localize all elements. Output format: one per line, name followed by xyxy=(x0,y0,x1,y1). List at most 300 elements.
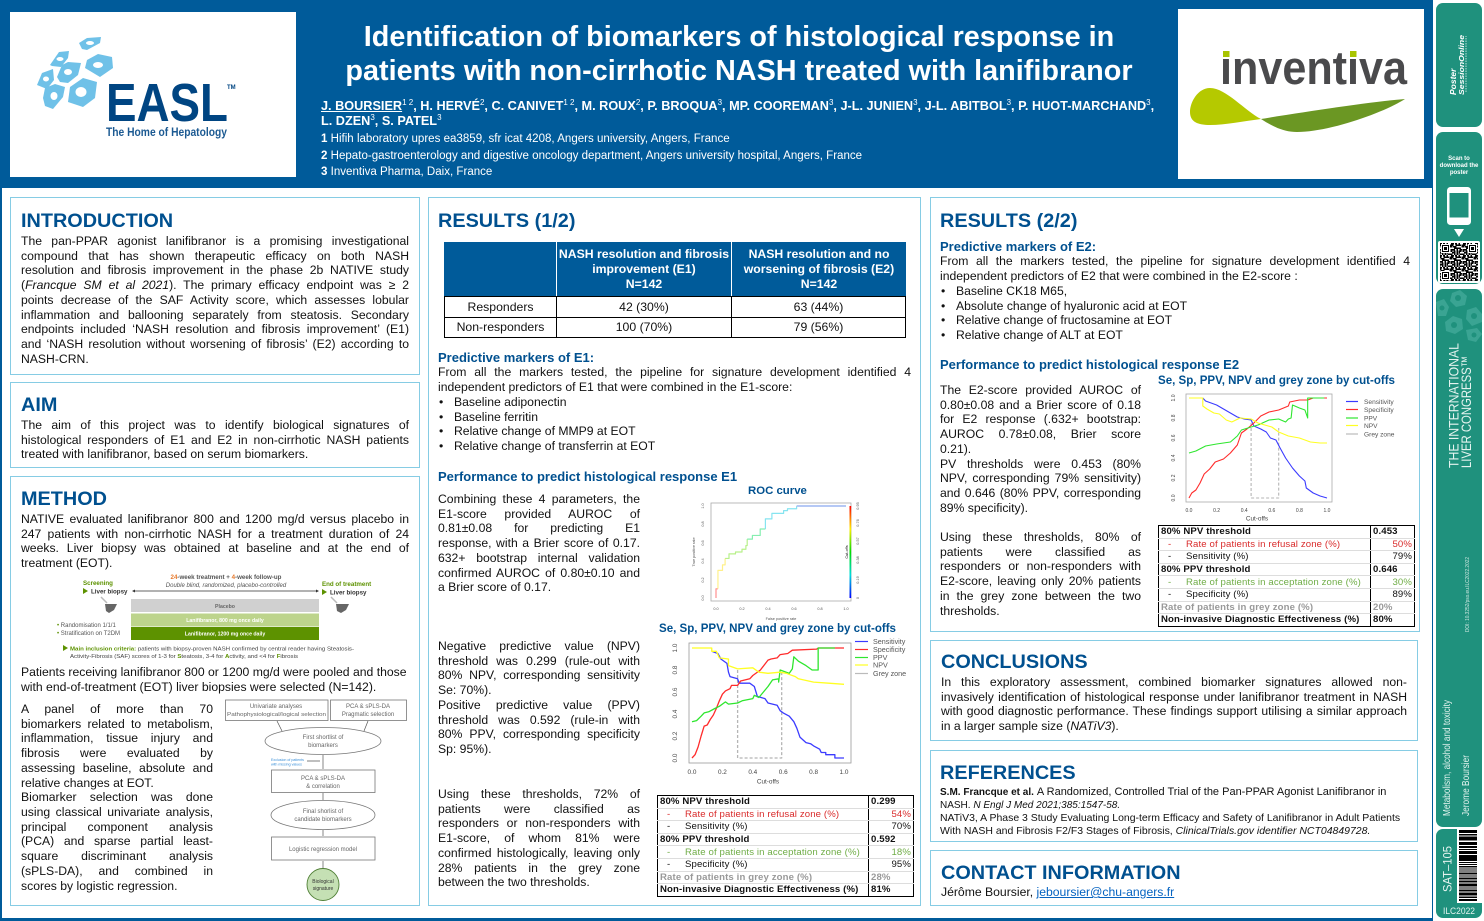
table: E1 thresholds: 95% xyxy=(891,859,911,870)
chart: ROC curve: 0.19 xyxy=(856,576,860,584)
authors: L. DZEN3, S. PATEL3 xyxy=(321,112,442,128)
method intro text: 247 patients with non-cirrhotic NASH for a treatment duration of 24 xyxy=(21,527,409,541)
table: E1 thresholds: - xyxy=(667,859,670,870)
chart: E2 cut-offs: NPV xyxy=(1364,423,1378,430)
introduction text xyxy=(21,234,409,366)
chart: E2 cut-offs: 1.0 xyxy=(1324,508,1331,514)
chart: E2 cut-offs: Specificity xyxy=(1364,407,1394,414)
sidebar xyxy=(1436,3,1482,918)
E2 classification text: patients were classified as xyxy=(940,545,1141,559)
chart: E2 cut-offs: 0.0 xyxy=(1186,508,1193,514)
chart: ROC curve: 0.4 xyxy=(765,607,771,611)
diagram: NATIVE study design: Activity-Fibrosis (SAF) scores of 1-3 for Steatosis, 3-4 for Activity, and <4 for Fibrosis xyxy=(70,654,298,660)
chart: E1 cut-offs: 0.0 xyxy=(688,769,697,776)
heading: aim: AIM xyxy=(21,394,57,416)
diagram: biomarker selection flowchart: signature xyxy=(313,886,333,892)
diagram: NATIVE study design: 24-week treatment + 4-week follow-up xyxy=(171,574,282,581)
table: E2 thresholds: 79% xyxy=(1392,551,1412,562)
biomarker panel text: Biomarker selection was done xyxy=(21,790,213,804)
table: E1 thresholds: Rate of patients in acceptation zone (%) xyxy=(685,847,860,858)
panel: scan to download: Scan to xyxy=(1448,156,1470,162)
chart: ROC curve: 0.2 xyxy=(739,607,745,611)
aim text: treated with lanifibranor, based on serum biomarkers. xyxy=(21,447,308,461)
method intro text: NATIVE evaluated lanifibranor 800 and 1200 mg/d versus placebo in xyxy=(21,512,409,526)
table body: 63 (44%) xyxy=(794,300,843,314)
E2 predictor list: Relative change of ALT at EOT xyxy=(956,328,1123,342)
E1 thresholds text: Sp: 95%). xyxy=(438,742,492,756)
E2 predictors text: From all the markers tested, the pipeline for signature development identified 4 xyxy=(940,254,1410,268)
panel: abstract number and barcode: ILC2022 xyxy=(1443,906,1475,917)
references text: S.M. Francque et al. A Randomized, Controlled Trial of the Pan-PPAR Agonist Lanifibranor in xyxy=(940,786,1386,798)
E1 thresholds text: Se: 70%). xyxy=(438,683,492,697)
diagram: NATIVE study design: • Randomisation 1/1/1 xyxy=(57,623,116,629)
biomarker panel text: using classical univariate analysis, xyxy=(21,805,213,819)
E1 thresholds text: 80% PPV, corresponding specificity xyxy=(438,727,640,741)
chart: E1 cut-offs: 0.4 xyxy=(672,709,679,718)
aim text xyxy=(21,418,410,461)
biomarker panel text: fibrosis were evaluated by xyxy=(21,746,213,760)
table: E2 thresholds: Rate of patients in grey zone (%) xyxy=(1161,602,1313,613)
logo: EASL: TM xyxy=(227,85,236,91)
diagram: biomarker selection flowchart: & correlation xyxy=(306,784,340,790)
chart: ROC curve: 0.8 xyxy=(701,521,705,527)
chart: E2 cut-offs: 0.0 xyxy=(1171,494,1177,501)
E1 thresholds text: threshold was 0.299 (rule-out with xyxy=(438,654,640,668)
diagram: biomarker selection flowchart: Biological xyxy=(312,879,334,885)
table: E1 thresholds: - xyxy=(667,809,670,820)
diagram: NATIVE study design: Lanifibranor, 800 mg once daily xyxy=(186,618,264,624)
table: E2 thresholds: 80% NPV threshold xyxy=(1161,526,1251,537)
title: patients with non-cirrhotic NASH treated with lanifibranor xyxy=(345,55,1133,87)
E1 score text: 0.81±0.08 for predicting E1 xyxy=(438,521,640,535)
heading: conclusions: CONCLUSIONS xyxy=(941,651,1088,673)
table: E1 thresholds: - xyxy=(667,847,670,858)
conclusions text: with good diagnostic performance. These findings support utilising a similar approach xyxy=(941,704,1407,718)
introduction text: compound that has shown therapeutic efficacy on both NASH xyxy=(21,249,409,263)
chart: E1 cut-offs: Specificity xyxy=(873,645,906,654)
E1 thresholds text xyxy=(438,639,640,756)
E1 classification text: patients were classified as xyxy=(438,802,640,816)
E2 predictor list: Relative change of fructosamine at EOT xyxy=(956,313,1172,327)
E1 thresholds text: Positive predictive value (PPV) xyxy=(438,698,640,712)
E1 score text: response, with a Brier score of 0.17. xyxy=(438,536,640,550)
diagram: NATIVE study design: Main inclusion criteria: patients with biopsy-proven NASH confirmed by central reader having Steatosis- xyxy=(70,646,354,652)
E1 score text: a Brier score of 0.17. xyxy=(438,580,551,594)
diagram: NATIVE study design: • Stratification on T2DM xyxy=(57,631,120,637)
panel: introduction xyxy=(10,197,420,375)
E2 score text: 0.80±0.08 and a Brier score of 0.18 xyxy=(940,398,1141,412)
table: E1 thresholds xyxy=(657,795,914,897)
introduction text: and ‘NASH resolution without worsening of fibrosis’ (E2) according to xyxy=(21,337,409,351)
chart: ROC curve: 0.2 xyxy=(701,577,705,583)
table: E1 thresholds: Sensitivity (%) xyxy=(685,821,748,832)
table: E1 E2 responders xyxy=(444,242,906,338)
chart: E1 cut-offs: Cut-offs xyxy=(757,778,779,786)
table: E2 thresholds: 0.646 xyxy=(1373,564,1398,575)
method intro text xyxy=(21,512,410,570)
table: E1 thresholds: 0.299 xyxy=(871,796,896,807)
chart title: ROC curve: ROC curve xyxy=(748,485,807,497)
chart: E2 cut-offs: Sensitivity xyxy=(1364,399,1394,406)
diagram: biomarker selection flowchart: with missing values xyxy=(271,762,302,766)
E1 predictor list: Baseline ferritin xyxy=(454,410,538,424)
table: E1 thresholds: 54% xyxy=(891,809,911,820)
panel: method xyxy=(10,476,420,906)
table: E2 thresholds: - xyxy=(1168,589,1171,600)
diagram: NATIVE study design: Lanifibranor, 1200 mg once daily xyxy=(185,632,265,638)
table: E1 thresholds: 81% xyxy=(871,884,891,895)
chart: E1 cut-offs: 0.0 xyxy=(672,753,679,762)
authors xyxy=(321,98,1154,128)
table: E2 thresholds: Rate of patients in acceptation zone (%) xyxy=(1186,577,1361,588)
biomarker panel text: biomarkers related to metabolism, xyxy=(21,717,213,731)
table body: 42 (30%) xyxy=(619,300,669,314)
panel: results 2/2 xyxy=(930,197,1420,632)
table header xyxy=(444,242,906,296)
logo: Inventiva: inventiva xyxy=(1220,41,1408,94)
pooling text: Patients receiving lanifibranor 800 or 1200 mg/d were pooled and those xyxy=(21,665,407,679)
table: E2 thresholds: 80% xyxy=(1373,614,1393,625)
E1 classification text xyxy=(438,787,640,889)
method intro text: treatment (EOT). xyxy=(21,556,112,570)
E1 thresholds text: threshold was 0.592 (rule-in with xyxy=(438,713,640,727)
panel: conclusions xyxy=(930,640,1418,741)
biomarker panel text: square discriminant analysis xyxy=(21,849,213,863)
table: E1 thresholds: - xyxy=(667,821,670,832)
heading: results 1/2: RESULTS (1/2) xyxy=(438,210,575,232)
E2 predictors text: independent predictors of E2 that were combined in the E2-score : xyxy=(940,269,1298,283)
introduction text: inflammation and ballooning separately from steatosis. Secondary xyxy=(21,308,409,322)
diagram: biomarker selection flowchart: Pragmatic selection xyxy=(342,712,394,718)
panel: poster session online xyxy=(1436,3,1482,127)
chart: ROC curve: 1.0 xyxy=(843,607,849,611)
chart: ROC curve: 0 xyxy=(856,597,860,599)
table: E2 thresholds: Specificity (%) xyxy=(1186,589,1249,600)
diagram: NATIVE study design: Double blind, randomized, placebo-controlled xyxy=(166,583,287,589)
E2 score text xyxy=(940,383,1142,515)
diagram: NATIVE study design xyxy=(57,574,372,660)
table header: worsening of fibrosis (E2) xyxy=(744,262,894,276)
conclusions text: in a larger sample size (NATiV3). xyxy=(941,719,1119,733)
table: E2 thresholds: 0.453 xyxy=(1373,526,1398,537)
table body: Non-responders xyxy=(457,320,544,334)
chart: E1 cut-offs xyxy=(672,637,906,786)
panel: results 1/2 xyxy=(428,197,921,906)
panel: congress and session: THE INTERNATIONAL xyxy=(1446,343,1462,468)
table: E2 thresholds: 20% xyxy=(1373,602,1393,613)
E1 score text: Combining these 4 parameters, the xyxy=(438,492,640,506)
chart: E2 cut-offs: 1.0 xyxy=(1171,394,1177,401)
affiliations: 2 Hepato-gastroenterology and digestive oncology department, Angers university hospital, Angers, France xyxy=(321,150,862,162)
E2 classification text: E2-score, leaving only 20% patients xyxy=(940,574,1141,588)
chart: E1 cut-offs: Grey zone xyxy=(873,669,906,678)
chart: E2 cut-offs: 0.4 xyxy=(1241,508,1248,514)
conclusions text: invasively identification of histological response under lanifibranor treatment in NASH xyxy=(941,690,1407,704)
E1 predictor list: Relative change of MMP9 at EOT xyxy=(454,424,636,438)
table: E1 thresholds: Rate of patients in grey zone (%) xyxy=(660,872,812,883)
E2 classification text: responders or non-responders with xyxy=(940,559,1141,573)
table: E2 thresholds: 89% xyxy=(1392,589,1412,600)
diagram: biomarker selection flowchart: Exclusion of patients xyxy=(271,758,304,762)
references text: NASH. N Engl J Med 2021;385:1547-58. xyxy=(940,800,1120,811)
chart title: E2 cut-offs: Se, Sp, PPV, NPV and grey zone by cut-offs xyxy=(1158,375,1395,387)
chart: E1 cut-offs: 0.6 xyxy=(779,769,788,776)
table: E2 thresholds: - xyxy=(1168,539,1171,550)
E2 score text: 89% specificity). xyxy=(940,501,1028,515)
panel: congress and session xyxy=(1436,289,1482,827)
panel: aim xyxy=(10,382,420,468)
aim text: The aim of this project was to identify biological signatures of xyxy=(21,418,409,432)
logo: EASL: EASL xyxy=(106,73,228,133)
heading: contact information: CONTACT INFORMATION xyxy=(941,862,1181,884)
E2 predictor list: Absolute change of hyaluronic acid at EOT xyxy=(956,299,1187,313)
biomarker panel text: A panel of more than 70 xyxy=(21,702,213,716)
affiliations: 3 Inventiva Pharma, Daix, France xyxy=(321,166,492,178)
pooling text: with end-of-treatment (EOT) liver biopsies were selected (N=142). xyxy=(21,680,376,694)
heading: references: REFERENCES xyxy=(940,762,1076,784)
references text: NATiV3, A Phase 3 Study Evaluating Long-term Efficacy and Safety of Lanifibranor in Adult Patients xyxy=(940,813,1400,824)
E2 predictor list xyxy=(942,284,1187,342)
diagram: NATIVE study design: Placebo xyxy=(215,604,235,610)
introduction text: resolution and fibrosis improvement in the phase 2b NATIVE study xyxy=(21,263,409,277)
chart: ROC curve: False positive rate xyxy=(766,617,796,621)
diagram: biomarker selection flowchart: PCA & sPLS-DA xyxy=(346,704,390,710)
panel: poster session online: Poster xyxy=(1448,68,1458,95)
panel: congress and session: Metabolism, alcohol and toxicity xyxy=(1441,699,1453,816)
logo: EASL: The Home of Hepatology xyxy=(106,127,228,139)
diagram: biomarker selection flowchart: PCA & sPLS-DA xyxy=(301,776,345,782)
E2 predictor list: Baseline CK18 M65, xyxy=(956,284,1067,298)
table: E1 thresholds: Rate of patients in refusal zone (%) xyxy=(685,809,839,820)
biomarker panel text: assessing baseline, absolute and xyxy=(21,761,213,775)
chart: E2 cut-offs: Cut-offs xyxy=(1246,516,1268,522)
table header: NASH resolution and no xyxy=(749,247,889,261)
E1 thresholds text: 80% NPV, corresponding sensitivity xyxy=(438,668,640,682)
E1 predictors text: From all the markers tested, the pipeline for signature development identified 4 xyxy=(438,365,911,379)
title: Identification of biomarkers of histological response in xyxy=(364,21,1114,53)
table: E2 thresholds: 80% PPV threshold xyxy=(1161,564,1250,575)
E1 predictors text: independent predictors of E1 that were combined in the E1-score: xyxy=(438,380,792,394)
chart: E1 cut-offs: 1.0 xyxy=(840,769,849,776)
chart: E1 cut-offs: 0.8 xyxy=(809,769,818,776)
chart: ROC curve: 0.4 xyxy=(701,558,705,564)
E1 score text: 632+ bootstrap internal validation xyxy=(438,551,640,565)
E2 score text: PV thresholds were 0.453 (80% xyxy=(940,457,1141,471)
E1 classification text: E1-score, of whom 81% were xyxy=(438,831,640,845)
E1 predictor list: Baseline adiponectin xyxy=(454,395,566,409)
chart: E2 cut-offs: 0.6 xyxy=(1171,434,1177,441)
E1 predictor list xyxy=(440,395,655,453)
chart: E2 cut-offs: 0.2 xyxy=(1171,474,1177,481)
chart: ROC curve xyxy=(692,502,860,621)
E1 thresholds text: Negative predictive value (NPV) xyxy=(438,639,640,653)
panel: poster session online: SessionOnline xyxy=(1457,34,1466,95)
E1 classification text: 28% patients in the grey zone xyxy=(438,861,640,875)
table: E1 thresholds: Specificity (%) xyxy=(685,859,748,870)
chart: E2 cut-offs: 0.8 xyxy=(1296,508,1303,514)
affiliations: 1 Hifih laboratory upres ea3859, sfr icat 4208, Angers university, Angers, France xyxy=(321,133,730,145)
table: E2 thresholds: Rate of patients in refusal zone (%) xyxy=(1186,539,1340,550)
panel: abstract number and barcode: SAT–105 xyxy=(1440,846,1454,892)
diagram: NATIVE study design: Screening xyxy=(83,580,113,587)
introduction text: endpoints included ‘NASH resolution and fibrosis improvement’ (E1) xyxy=(21,322,409,336)
table: E1 thresholds: 0.592 xyxy=(871,834,896,845)
chart: ROC curve: 0.6 xyxy=(791,607,797,611)
diagram: biomarker selection flowchart: biomarkers xyxy=(308,743,338,749)
introduction text: (Francque SM et al 2021). The primary efficacy endpoint was ≥ 2 xyxy=(21,278,409,292)
chart: E2 cut-offs: PPV xyxy=(1364,416,1378,422)
biomarker panel text xyxy=(21,702,213,893)
table: E1 thresholds: 70% xyxy=(891,821,911,832)
panel: scan to download xyxy=(1436,132,1482,284)
chart: ROC curve: 1.0 xyxy=(701,503,705,509)
E1 classification text: Using these thresholds, 72% of xyxy=(438,787,640,801)
subheading: performance E2: Performance to predict histological response E2 xyxy=(940,357,1239,372)
E1 classification text: responders or non-responders with xyxy=(438,816,640,830)
affiliations xyxy=(321,133,862,178)
method intro text: weeks. Liver biopsy was obtained at baseline and at the end of xyxy=(21,541,409,555)
table: E1 thresholds: 80% NPV threshold xyxy=(660,796,750,807)
E2 score text: AUROC 0.78±0.08, Brier score xyxy=(940,427,1141,441)
diagram: biomarker selection flowchart: Final shorlist of xyxy=(303,809,344,815)
E2 classification text: in the grey zone between the two xyxy=(940,589,1141,603)
table header: N=142 xyxy=(801,277,837,291)
introduction text: points decrease of the SAF Activity score, which assesses lobular xyxy=(21,293,409,307)
chart: E1 cut-offs: 1.0 xyxy=(672,643,679,652)
table: E1 thresholds: Non-invasive Diagnostic Effectiveness (%) xyxy=(660,884,858,895)
chart: E2 cut-offs: 0.6 xyxy=(1268,508,1275,514)
diagram: biomarker selection flowchart: Pathophysiological/logical selection xyxy=(227,712,326,718)
table: E2 thresholds: 50% xyxy=(1392,539,1412,550)
E2 classification text xyxy=(940,530,1142,618)
E2 score text: 0.21). xyxy=(940,442,971,456)
chart: ROC curve: 0.38 xyxy=(856,556,860,564)
chart title: E1 cut-offs: Se, Sp, PPV, NPV and grey zone by cut-offs xyxy=(659,623,896,635)
E2 classification text: thresholds. xyxy=(940,604,1000,618)
biomarker panel text: inflammation, tissue injury and xyxy=(21,731,213,745)
table: E2 thresholds: 30% xyxy=(1392,577,1412,588)
introduction text: NASH-CRN. xyxy=(21,352,89,366)
diagram: biomarker selection flowchart: Univariate analyses xyxy=(250,704,302,710)
biomarker panel text: (sPLS-DA), and combined in xyxy=(21,864,213,878)
chart: E1 cut-offs: 0.8 xyxy=(672,665,679,674)
table header: improvement (E1) xyxy=(592,262,696,276)
panel: contact information xyxy=(930,850,1418,906)
subheading: performance E1: Performance to predict histological response E1 xyxy=(438,469,737,484)
subheading: predictive markers E1: Predictive markers of E1: xyxy=(438,350,594,365)
table body: 79 (56%) xyxy=(794,320,843,334)
E1 score text: confirmed AUROC of 0.80±0.10 and xyxy=(438,566,640,580)
chart: E1 cut-offs: 0.2 xyxy=(672,731,679,740)
table header: N=142 xyxy=(626,277,662,291)
table: E2 thresholds: Non-invasive Diagnostic Effectiveness (%) xyxy=(1161,614,1359,625)
chart: E1 cut-offs: PPV xyxy=(873,653,888,662)
introduction text: The pan-PPAR agonist lanifibranor is a promising investigational xyxy=(21,234,409,248)
table: E2 thresholds: - xyxy=(1168,577,1171,588)
E2 score text: and 0.646 (80% PPV, corresponding xyxy=(940,486,1141,500)
references text xyxy=(940,786,1400,837)
chart: E2 cut-offs: 0.4 xyxy=(1171,454,1177,461)
E1 predictors text xyxy=(438,365,911,394)
E1 score text xyxy=(438,492,640,594)
biomarker panel text: (PCA) and sparse partial least- xyxy=(21,834,213,848)
panel: congress and session: LIVER CONGRESS™ xyxy=(1458,356,1474,468)
panel: references xyxy=(930,750,1418,842)
table: E2 thresholds: Sensitivity (%) xyxy=(1186,551,1249,562)
diagram: NATIVE study design: Liver biopsy xyxy=(330,590,367,596)
E2 score text: for E2 response (.632+ bootstrap: xyxy=(940,412,1141,426)
E2 classification text: Using these thresholds, 80% of xyxy=(940,530,1141,544)
E2 predictors text xyxy=(940,254,1410,283)
table header: NASH resolution and fibrosis xyxy=(559,247,729,261)
contact details: Jérôme Boursier, jeboursier@chu-angers.fr xyxy=(941,885,1174,899)
conclusions text: In this exploratory assessment, combined biomarker signatures allowed non- xyxy=(941,675,1407,689)
biomarker panel text: scores by logistic regression. xyxy=(21,879,177,893)
diagram: NATIVE study design: Liver biopsy xyxy=(91,588,128,596)
E2 score text: The E2-score provided AUROC of xyxy=(940,383,1141,397)
table body: 100 (70%) xyxy=(616,320,672,334)
chart: ROC curve: 0.6 xyxy=(701,540,705,546)
diagram: biomarker selection flowchart: First shortlist of xyxy=(303,735,344,741)
chart: E1 cut-offs: Sensitivity xyxy=(873,637,906,646)
diagram: biomarker selection flowchart: candidate biomarkers xyxy=(294,817,352,823)
E1 classification text: between the two thresholds. xyxy=(438,875,590,889)
chart: ROC curve: Cut-offs xyxy=(845,545,849,559)
heading: introduction: INTRODUCTION xyxy=(21,210,173,232)
chart: E1 cut-offs: NPV xyxy=(873,660,888,670)
chart: ROC curve: 0.8 xyxy=(817,607,823,611)
table: E2 thresholds: - xyxy=(1168,551,1171,562)
E1 classification text: confirmed histologically, leaving only xyxy=(438,846,640,860)
panel: scan to download: poster xyxy=(1450,170,1469,176)
logo: EASL xyxy=(10,12,296,177)
diagram: biomarker selection flowchart xyxy=(225,700,407,901)
E1 predictor list: Relative change of transferrin at EOT xyxy=(454,439,655,453)
chart: ROC curve: 0.0 xyxy=(701,595,705,601)
chart: E2 cut-offs: 0.8 xyxy=(1171,414,1177,421)
subheading: predictive markers E2: Predictive markers of E2: xyxy=(940,239,1096,254)
header band xyxy=(0,0,1433,188)
table: E2 thresholds xyxy=(1158,525,1415,627)
logo: Inventiva xyxy=(1178,9,1424,179)
table: E1 thresholds: 18% xyxy=(891,847,911,858)
heading: results 2/2: RESULTS (2/2) xyxy=(940,210,1077,232)
chart: ROC curve: 0.57 xyxy=(856,537,860,545)
chart: E1 cut-offs: 0.4 xyxy=(748,769,758,776)
table: E1 thresholds: 80% PPV threshold xyxy=(660,834,749,845)
panel: abstract number and barcode xyxy=(1436,829,1482,918)
panel: congress and session: Jerome Boursier xyxy=(1460,755,1472,816)
diagram: biomarker selection flowchart: Logistic regression model xyxy=(289,847,357,853)
diagram: NATIVE study design: End of treatment xyxy=(322,581,371,588)
chart: ROC curve: 0.76 xyxy=(856,519,860,527)
panel: congress and session: DOI: 10.3252/pso.eu.ILC2022.2022 xyxy=(1465,557,1471,632)
chart: E1 cut-offs: 0.2 xyxy=(718,769,727,776)
E1 score text: E1-score provided AUROC of xyxy=(438,507,640,521)
table body xyxy=(444,296,906,338)
chart: ROC curve: 0.95 xyxy=(856,502,860,510)
E2 score text: NPV, corresponding 79% sensitivity) xyxy=(940,471,1141,485)
aim text: histological responders of E1 and E2 in non-cirrhotic NASH patients xyxy=(21,433,409,447)
chart: E2 cut-offs: Grey zone xyxy=(1364,432,1395,438)
table: E1 thresholds: 28% xyxy=(871,872,891,883)
authors: J. BOURSIER1 2, H. HERVÉ2, C. CANIVET1 2, M. ROUX2, P. BROQUA3, MP. COOREMAN3, J-L. JUNIEN3, J-L. ABITBOL3, P. HUOT-MARCHAND3, xyxy=(321,98,1154,113)
title xyxy=(345,21,1133,87)
conclusions text xyxy=(941,675,1407,733)
pooling text xyxy=(21,665,407,694)
table body: Responders xyxy=(467,300,534,314)
chart: E2 cut-offs: 0.2 xyxy=(1213,508,1220,514)
